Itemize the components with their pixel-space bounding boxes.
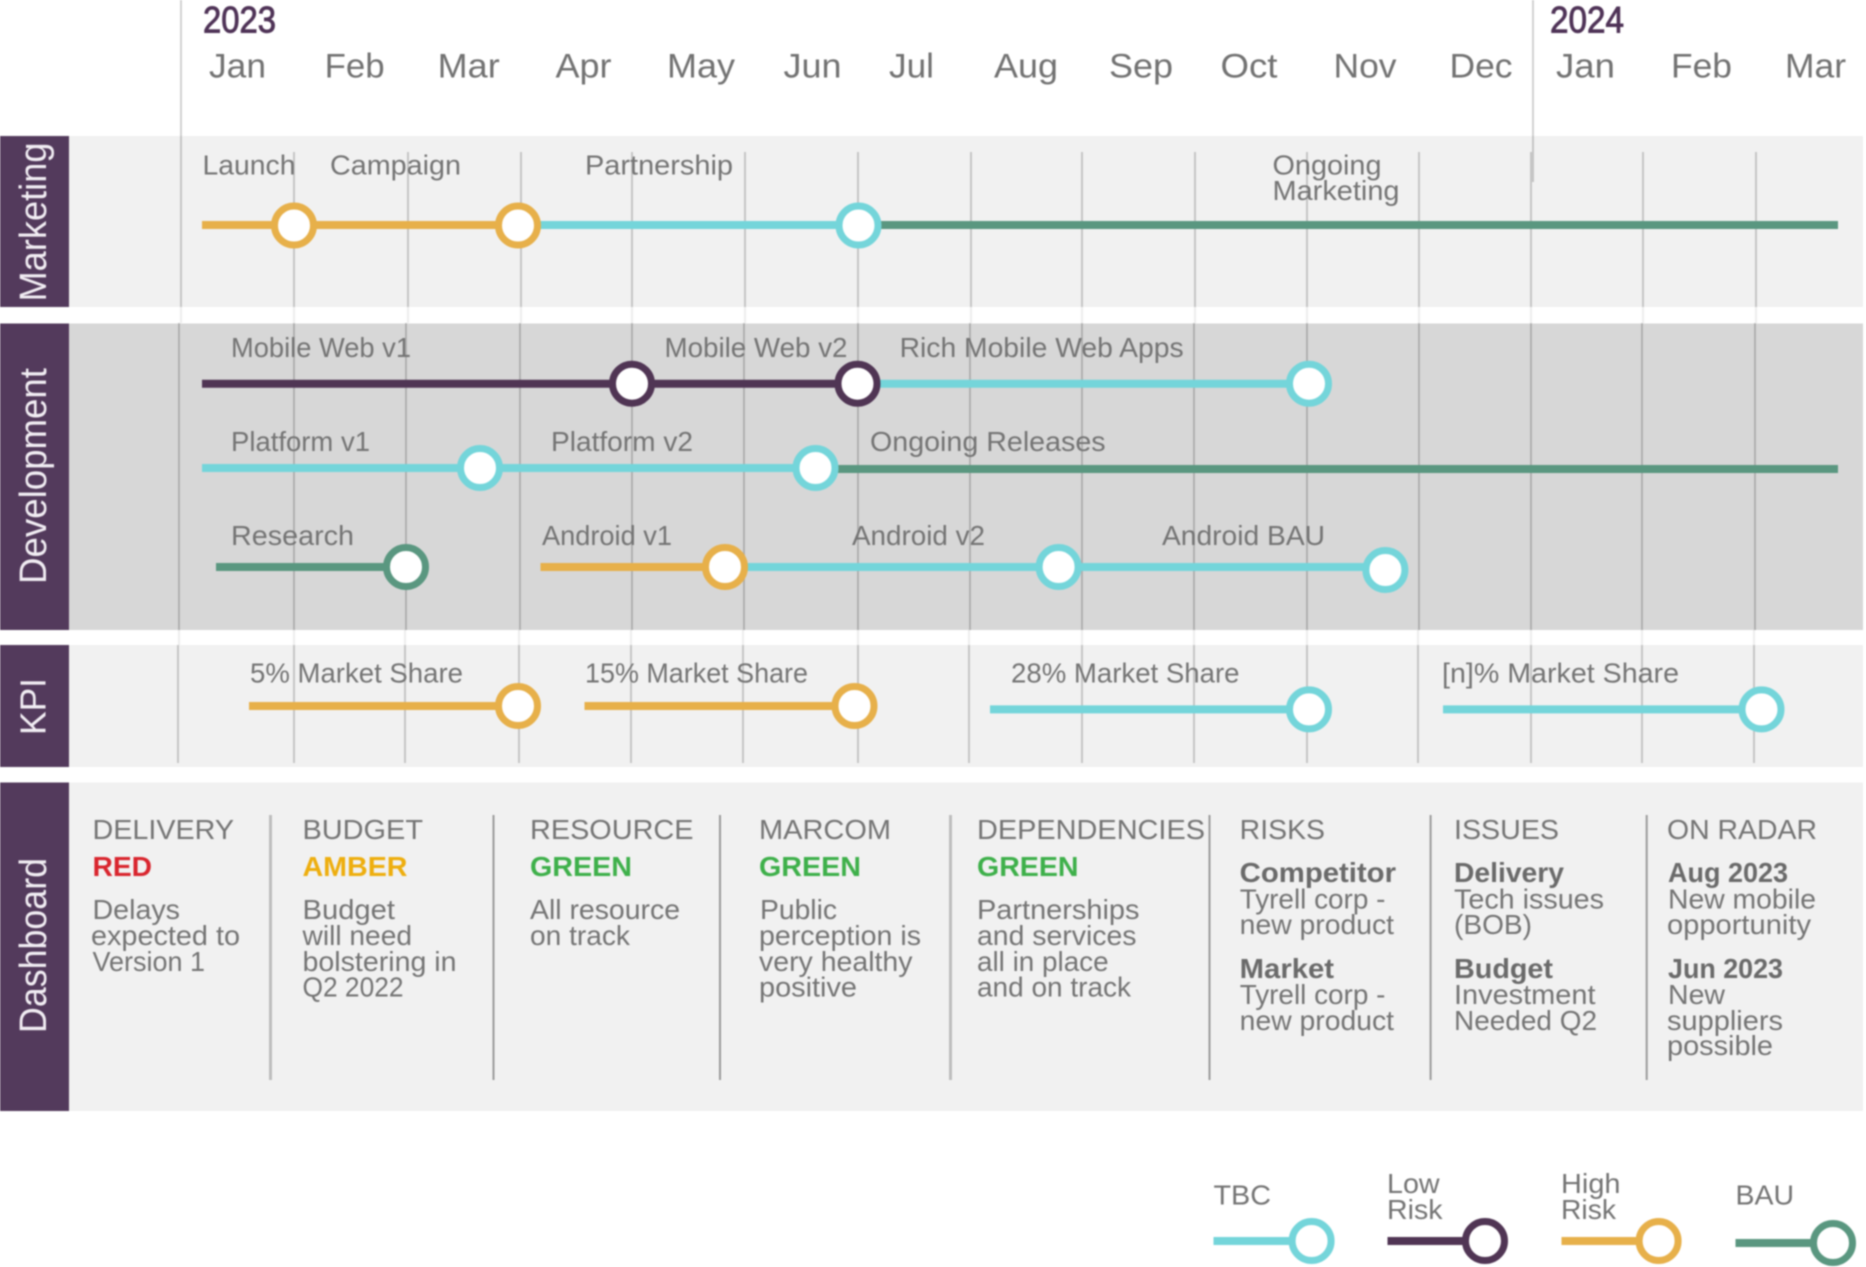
column: resource — [530, 814, 694, 951]
timeline header — [203, 0, 1846, 86]
column: on radar: New — [1668, 979, 1726, 1010]
column: resource: All resource — [530, 894, 680, 925]
column: dependencies: all in place — [977, 946, 1109, 977]
column: on radar: Jun 2023 — [1668, 953, 1783, 984]
column: budget: Q2 2022 — [302, 972, 404, 1002]
month labels: May — [667, 48, 735, 86]
track: mobile web — [202, 364, 1328, 403]
column: budget: bolstering in — [302, 946, 456, 977]
labels: kpi: 5% Market Share — [250, 658, 463, 688]
labels: development: Research — [231, 520, 354, 551]
column: marcom: very healthy — [759, 946, 912, 977]
column: issues: Investment — [1454, 979, 1596, 1010]
labels: development: Rich Mobile Web Apps — [900, 332, 1184, 363]
labels: marketing: Partnership — [585, 150, 733, 180]
track: platform — [202, 448, 1838, 488]
column: dependencies: GREEN — [977, 851, 1078, 882]
column: on radar — [1667, 814, 1817, 1061]
track: marketing — [202, 206, 1838, 245]
column: risks: Tyrell corp - — [1240, 884, 1385, 915]
month labels: Oct — [1220, 48, 1278, 86]
month labels: Sep — [1109, 48, 1173, 86]
panel: marketing — [0, 136, 1863, 307]
column: on radar: possible — [1667, 1030, 1773, 1061]
column: marcom: MARCOM — [759, 814, 891, 845]
column: on radar: New mobile — [1668, 884, 1816, 915]
column: risks: Market — [1240, 953, 1334, 984]
month labels: Aug — [994, 48, 1058, 86]
month labels: Mar — [1785, 48, 1846, 86]
column: issues: Delivery — [1454, 857, 1564, 888]
column: budget: will need — [301, 920, 412, 951]
month labels: Mar — [438, 48, 500, 86]
column: delivery: RED — [92, 851, 152, 882]
column: issues: ISSUES — [1454, 814, 1559, 845]
column: marcom: perception is — [759, 920, 921, 951]
legend: low risk: Risk — [1387, 1194, 1444, 1225]
column: budget: BUDGET — [302, 814, 423, 845]
column: on radar: Aug 2023 — [1668, 857, 1788, 888]
column: risks — [1240, 814, 1396, 1036]
column: issues: (BOB) — [1454, 909, 1532, 940]
column: on radar: suppliers — [1667, 1005, 1783, 1036]
legend: high risk — [1561, 1168, 1678, 1260]
labels: kpi — [250, 658, 1679, 688]
column: budget — [301, 814, 456, 1002]
track: android — [540, 548, 1405, 590]
panel: development — [0, 323, 1863, 630]
column: budget: AMBER — [302, 851, 408, 882]
legend: bau: BAU — [1736, 1180, 1794, 1210]
labels: marketing — [202, 150, 1400, 206]
legend: high risk: Risk — [1561, 1194, 1617, 1225]
month labels: Jan — [1556, 48, 1615, 86]
labels: development: Mobile Web v1 — [231, 332, 411, 363]
column: delivery: Delays — [92, 894, 180, 925]
tab: kpi: KPI — [12, 678, 54, 735]
column: delivery: DELIVERY — [92, 814, 234, 845]
labels: marketing: Campaign — [330, 150, 461, 180]
tab: marketing — [0, 136, 69, 307]
month labels: Nov — [1334, 48, 1396, 86]
column: dependencies: Partnerships — [977, 894, 1140, 925]
column: on radar: ON RADAR — [1667, 814, 1817, 845]
legend: low risk — [1387, 1168, 1504, 1260]
month labels — [209, 48, 1846, 86]
labels: development: Platform v2 — [551, 426, 693, 457]
panel: kpi — [0, 645, 1863, 767]
month labels: Feb — [1671, 48, 1732, 86]
labels: development: Android v2 — [852, 520, 985, 551]
column: delivery: expected to — [91, 920, 240, 951]
column: budget: Budget — [302, 894, 395, 925]
column: resource: on track — [530, 920, 631, 951]
column: risks: new product — [1240, 1005, 1394, 1036]
column: on radar: opportunity — [1667, 909, 1811, 940]
column: delivery — [91, 814, 240, 977]
tab: kpi — [0, 645, 69, 767]
column: risks: new product — [1240, 909, 1394, 940]
column: dependencies: and services — [977, 920, 1136, 951]
month labels: Jan — [209, 48, 266, 86]
column: risks: RISKS — [1240, 814, 1325, 845]
month labels: Jul — [889, 48, 934, 86]
legend: high risk: High — [1561, 1168, 1620, 1199]
legend: bau — [1736, 1180, 1852, 1262]
legend: tbc: TBC — [1214, 1180, 1271, 1210]
labels: marketing: Ongoing — [1272, 150, 1382, 180]
tab: dashboard: Dashboard — [13, 858, 55, 1033]
labels: development: Ongoing Releases — [870, 426, 1106, 457]
column: delivery: Version 1 — [92, 946, 205, 977]
tab: development: Development — [13, 368, 55, 584]
month labels: Apr — [556, 48, 612, 86]
labels: kpi: 28% Market Share — [1011, 658, 1240, 688]
labels: development: Mobile Web v2 — [664, 332, 848, 363]
column: issues: Budget — [1454, 953, 1553, 984]
legend: low risk: Low — [1387, 1168, 1440, 1199]
legend: tbc — [1214, 1180, 1331, 1260]
year 2024: 2024 — [1550, 0, 1624, 41]
labels: development — [231, 332, 1325, 551]
month labels: Jun — [784, 48, 842, 86]
tab: marketing: Marketing — [13, 142, 55, 302]
labels: development: Android v1 — [542, 520, 672, 551]
column: issues: Needed Q2 — [1454, 1005, 1597, 1036]
column: resource: RESOURCE — [530, 814, 694, 845]
panel: dashboard — [0, 782, 1863, 1111]
column: dependencies: DEPENDENCIES — [977, 814, 1205, 845]
year 2023: 2023 — [203, 0, 276, 41]
column: marcom: GREEN — [759, 851, 861, 882]
labels: marketing: Launch — [202, 150, 296, 180]
month labels: Feb — [325, 48, 385, 86]
column: issues — [1454, 814, 1604, 1036]
column: marcom — [759, 814, 921, 1002]
column: marcom: Public — [760, 894, 837, 925]
column: issues: Tech issues — [1454, 884, 1604, 915]
column: risks: Tyrell corp - — [1240, 979, 1385, 1010]
column: resource: GREEN — [530, 851, 632, 882]
column: dependencies: and on track — [977, 972, 1132, 1002]
track: research — [216, 548, 426, 586]
tab: dashboard — [0, 782, 69, 1111]
legend — [1214, 1168, 1852, 1262]
labels: development: Android BAU — [1162, 520, 1325, 551]
labels: development: Platform v1 — [231, 426, 370, 457]
month labels: Dec — [1450, 48, 1512, 86]
tab: development — [0, 324, 69, 630]
column: marcom: positive — [759, 972, 857, 1002]
column: risks: Competitor — [1240, 857, 1396, 888]
labels: kpi: [n]% Market Share — [1442, 658, 1679, 688]
labels: marketing: Marketing — [1272, 175, 1400, 206]
labels: kpi: 15% Market Share — [585, 658, 808, 688]
track: kpi milestones — [249, 686, 1781, 729]
column: dependencies — [977, 814, 1205, 1002]
